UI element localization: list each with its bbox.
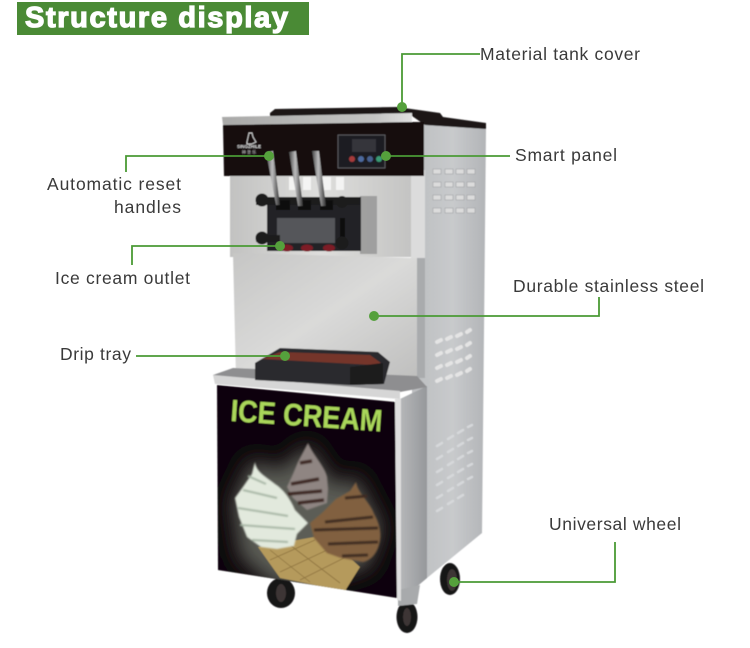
callout: universal wheel: [449, 514, 681, 587]
lower steel front panel: [233, 253, 417, 378]
base shelf: [213, 368, 427, 392]
callout: ice cream outlet: [55, 241, 285, 288]
side vents upper: [433, 169, 475, 213]
ICE CREAM lettering: ICE CREAM: [230, 393, 384, 439]
chocolate brown swirl: [310, 482, 380, 562]
callout: drip tray: [60, 344, 290, 364]
white swirl: [235, 462, 308, 549]
side vents middle: [437, 330, 470, 381]
callout: universal wheel: Universal wheel: [549, 514, 681, 534]
logo: [237, 133, 261, 154]
title banner: Structure display: [25, 2, 288, 34]
callout: automatic reset handles: Automatic reset: [47, 174, 181, 194]
ice cream picture: [232, 443, 382, 591]
ice cream machine: [213, 107, 486, 633]
smart panel display: [338, 135, 385, 168]
black head: [223, 122, 424, 176]
machine upper front: [230, 172, 411, 257]
drip tray: [255, 348, 390, 385]
nozzle gaps: [289, 177, 344, 190]
callout: smart panel: Smart panel: [515, 145, 617, 165]
material tank cover: [270, 107, 486, 129]
black advertising panel: [217, 385, 397, 598]
callout: material tank cover: Material tank cover: [480, 44, 640, 64]
callout: drip tray: Drip tray: [60, 344, 131, 364]
ice cream outlet block: [256, 194, 377, 254]
chocolate grey swirl: [287, 443, 328, 510]
callout: smart panel: [381, 145, 617, 165]
callout: automatic reset handles: [47, 151, 274, 217]
logo: SINGZHILE: [237, 144, 261, 149]
silver top band: [222, 113, 412, 125]
callout: automatic reset handles: handles: [114, 197, 181, 217]
wheels: [267, 563, 460, 633]
cones: [258, 535, 360, 591]
callout: durable stainless steel: Durable stainless steel: [513, 276, 704, 296]
callout: ice cream outlet: Ice cream outlet: [55, 268, 190, 288]
logo: 神 圣 乐: [242, 148, 256, 154]
callout: durable stainless steel: [369, 276, 704, 321]
machine right side panel: [412, 124, 486, 590]
dispenser handles: [266, 151, 326, 206]
callout: material tank cover: [397, 44, 640, 112]
side vents lower: [437, 425, 472, 511]
